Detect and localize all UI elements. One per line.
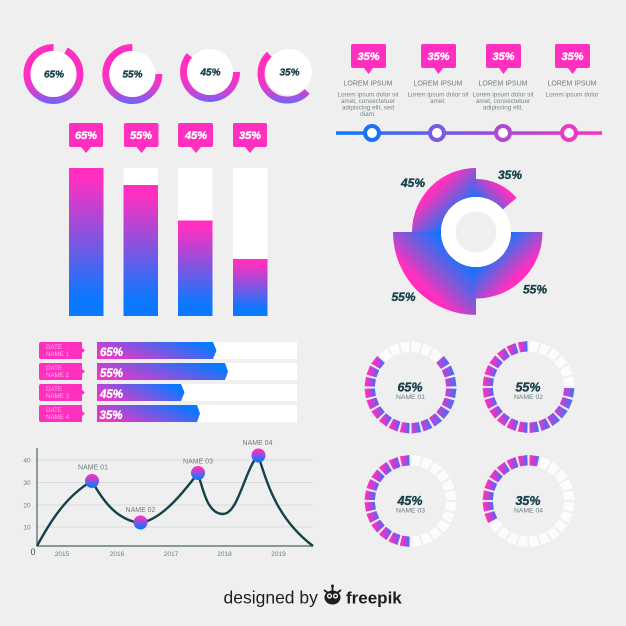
timeline step 2 callout: 35% bbox=[427, 51, 450, 63]
timeline step 2 callout bbox=[407, 44, 469, 105]
radial chart centre hole bbox=[441, 197, 511, 267]
horizontal bar 1: NAME 1 bbox=[46, 351, 70, 358]
radial chart labels: 45% bbox=[400, 176, 425, 190]
timeline step 4 callout bbox=[546, 44, 599, 98]
segmented ring 35%: NAME 04 bbox=[514, 508, 543, 514]
sector 55% left bbox=[393, 232, 476, 315]
timeline step 2 callout: amet. bbox=[430, 98, 446, 105]
donut gauge 65% bbox=[27, 47, 80, 100]
segmented ring 55% bbox=[483, 342, 574, 432]
horizontal bar 4 bbox=[39, 405, 297, 422]
timeline step 4 callout: Lorem ipsum dolor bbox=[546, 92, 599, 98]
donut gauge 65%: 65% bbox=[44, 70, 64, 80]
horizontal bar 4: NAME 4 bbox=[46, 414, 70, 421]
axis labels: 2017 bbox=[164, 551, 179, 558]
bar 45%: 45% bbox=[184, 130, 207, 142]
radial chart labels: 55% bbox=[523, 282, 547, 296]
data point NAME 01 bbox=[78, 464, 108, 488]
sector 35% bbox=[476, 179, 517, 210]
timeline step 4 callout: LOREM IPSUM bbox=[547, 80, 597, 88]
axis labels: 30 bbox=[23, 480, 31, 487]
segmented ring 55%: NAME 02 bbox=[514, 394, 543, 401]
bar 55%: 55% bbox=[130, 130, 152, 142]
timeline step 1 callout: LOREM IPSUM bbox=[343, 80, 393, 88]
horizontal bar 4: DATE bbox=[46, 407, 62, 414]
bar 65% bbox=[69, 123, 104, 316]
panel: timeline bbox=[336, 44, 602, 140]
bar 45% bbox=[178, 123, 213, 316]
axis labels: 20 bbox=[23, 502, 31, 510]
radial chart labels: 35% bbox=[498, 168, 522, 182]
axis labels: 2019 bbox=[271, 551, 286, 558]
segmented ring 55%: 55% bbox=[515, 380, 541, 394]
icon: freepik mascot bbox=[324, 584, 341, 604]
axis labels: 10 bbox=[23, 524, 31, 532]
segmented ring 35%: 35% bbox=[515, 494, 541, 508]
data point NAME 04 bbox=[243, 440, 273, 462]
segmented ring 45% bbox=[365, 456, 456, 546]
horizontal bar 3 bbox=[39, 384, 297, 401]
horizontal bar 2 bbox=[39, 363, 297, 380]
timeline step 3 callout: amet, consectetuer bbox=[476, 98, 531, 105]
axis labels bbox=[23, 458, 286, 558]
horizontal bar 1 bbox=[39, 342, 297, 359]
timeline step 3 callout: Lorem ipsum dolor sit bbox=[472, 92, 534, 98]
donut gauge 55%: 55% bbox=[122, 70, 143, 80]
timeline step 3 callout bbox=[472, 44, 534, 112]
donut gauge 45%: 45% bbox=[199, 68, 221, 78]
panel: line chart bbox=[23, 440, 313, 558]
data point NAME 02 bbox=[126, 507, 156, 530]
segmented ring 45%: NAME 03 bbox=[396, 508, 425, 514]
data point NAME 02: NAME 02 bbox=[126, 507, 156, 514]
horizontal bar 2: NAME 2 bbox=[46, 372, 70, 379]
panel: radial sector chart bbox=[391, 168, 547, 315]
horizontal bar 1: DATE bbox=[46, 344, 62, 351]
bar 65%: 65% bbox=[75, 130, 97, 142]
timeline step 1 callout: Lorem ipsum dolor sit bbox=[337, 92, 399, 98]
axis labels: 2015 bbox=[55, 551, 70, 558]
data point NAME 03 bbox=[183, 458, 213, 480]
footer: freepik credit bbox=[224, 584, 402, 608]
timeline step 1 callout: 35% bbox=[357, 51, 380, 63]
segmented ring 45%: 45% bbox=[396, 494, 423, 508]
radial chart labels: 55% bbox=[391, 290, 416, 304]
data point NAME 01: NAME 01 bbox=[78, 464, 108, 472]
timeline step 3 callout: adipiscing elit. bbox=[483, 104, 523, 112]
panel: donut gauges row bbox=[27, 47, 312, 100]
timeline step 4 callout: 35% bbox=[561, 51, 584, 63]
donut gauge 45% bbox=[183, 49, 236, 98]
timeline step 1 callout bbox=[337, 44, 399, 118]
data point NAME 04: NAME 04 bbox=[243, 440, 273, 447]
timeline step 2 callout: Lorem ipsum dolor sit bbox=[407, 92, 469, 98]
chart axes bbox=[37, 448, 313, 546]
horizontal bar 2: DATE bbox=[46, 365, 62, 372]
timeline step 1 callout: amet, consectetuer bbox=[341, 98, 396, 105]
bar 35% bbox=[233, 123, 268, 316]
axis labels: 40 bbox=[23, 458, 31, 464]
horizontal bar 3: 45% bbox=[99, 389, 123, 401]
timeline step 1 callout: diam. bbox=[360, 111, 376, 118]
freepik wordmark: freepik bbox=[346, 588, 402, 608]
segmented ring 35% bbox=[483, 456, 574, 546]
panel: vertical bar chart bbox=[69, 123, 268, 316]
horizontal bar 4: 35% bbox=[99, 410, 123, 422]
data point NAME 03: NAME 03 bbox=[183, 458, 213, 466]
timeline step 3 callout: 35% bbox=[492, 51, 515, 63]
donut gauge 35%: 35% bbox=[279, 68, 300, 78]
horizontal bar 1: 65% bbox=[100, 347, 123, 359]
timeline line and markers bbox=[336, 126, 602, 140]
radial chart labels bbox=[391, 168, 547, 304]
segmented ring 65%: 65% bbox=[397, 380, 423, 394]
chart grid lines bbox=[37, 460, 313, 527]
bar 35%: 35% bbox=[239, 130, 261, 142]
donut gauge 55% bbox=[106, 48, 159, 100]
axis labels: 0 bbox=[30, 547, 36, 557]
segmented ring 65%: NAME 01 bbox=[396, 394, 425, 401]
timeline step 1 callout: adipiscing elit, sed bbox=[342, 104, 395, 112]
timeline step 2 callout: LOREM IPSUM bbox=[413, 80, 463, 88]
panel: segmented rings bbox=[365, 342, 574, 546]
donut gauge 35% bbox=[261, 49, 312, 100]
bar 55% bbox=[124, 123, 158, 316]
horizontal bar 2: 55% bbox=[100, 368, 123, 380]
horizontal bar 3: NAME 3 bbox=[46, 393, 70, 400]
panel: horizontal bars bbox=[39, 342, 297, 422]
credit text: designed by bbox=[224, 588, 318, 608]
axis labels: 2016 bbox=[110, 551, 125, 558]
sector 45% bbox=[412, 168, 476, 232]
axis labels: 2018 bbox=[217, 551, 232, 558]
timeline step 3 callout: LOREM IPSUM bbox=[478, 80, 528, 88]
sector 55% right bbox=[476, 232, 542, 298]
horizontal bar 3: DATE bbox=[46, 386, 62, 393]
segmented ring 65% bbox=[365, 342, 456, 433]
data curve bbox=[37, 455, 313, 546]
